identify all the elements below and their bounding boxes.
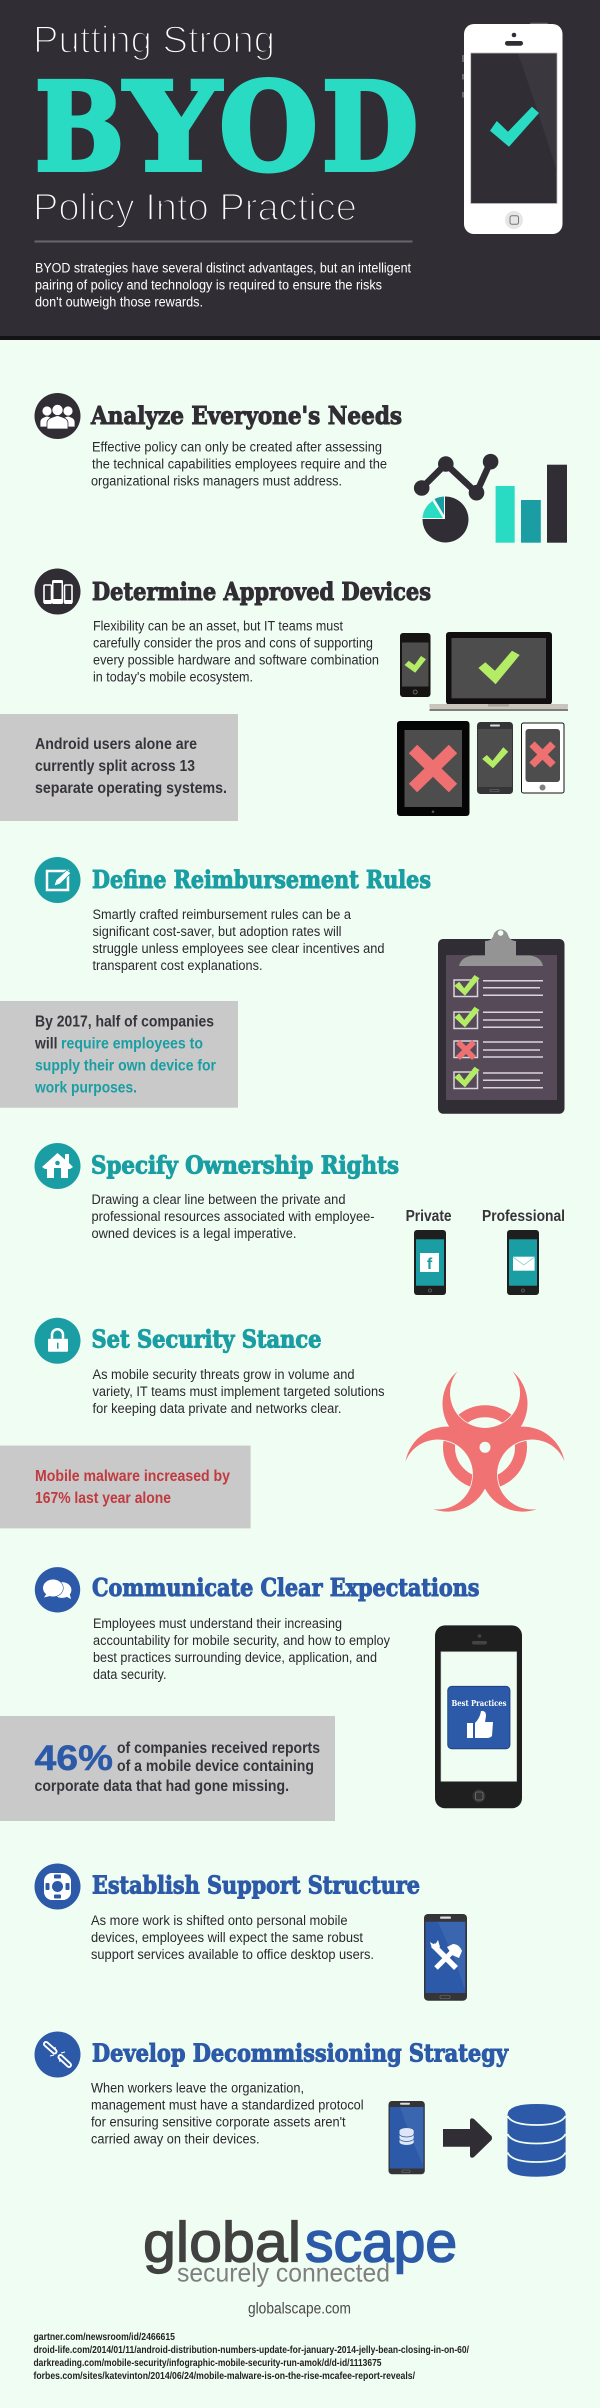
body text: carefully consider the pros and cons of supporting	[93, 636, 373, 651]
intro text: don't outweigh those rewards.	[35, 295, 203, 310]
intro text: BYOD strategies have several distinct advantages, but an intelligent	[35, 261, 411, 276]
sources: darkreading.com/mobile-security/infographic-mobile-security-run-amok/d/d-id/1113675	[34, 2358, 382, 2369]
panel: header	[0, 0, 600, 340]
body text: Smartly crafted reimbursement rules can be a	[92, 907, 351, 922]
heading: Set Security Stance	[92, 1325, 322, 1354]
heading: Determine Approved Devices	[92, 577, 431, 606]
body text: Employees must understand their increasing	[93, 1616, 342, 1631]
body text	[92, 907, 384, 973]
icon: speech bubbles	[35, 1567, 80, 1613]
callout: Android: Android users alone are	[35, 736, 197, 753]
body text: struggle unless employees see clear incentives and	[92, 941, 384, 956]
logo: globalscape	[143, 2211, 457, 2288]
icon: edit	[34, 857, 80, 903]
title: BYOD	[35, 56, 418, 198]
icon: lifebuoy	[34, 1864, 80, 1910]
body text	[91, 1913, 374, 1962]
sources	[34, 2332, 469, 2382]
body text: organizational risks managers must address.	[91, 474, 342, 489]
body text: Flexibility can be an asset, but IT teams must	[93, 619, 343, 634]
callout: Android	[0, 714, 238, 821]
body text: carried away on their devices.	[91, 2132, 260, 2147]
icon: people	[34, 393, 80, 439]
icon: professional phone	[507, 1230, 539, 1295]
icon: database	[508, 2104, 566, 2177]
website link: globalscape.com	[248, 2300, 351, 2317]
icon: private phone	[414, 1230, 446, 1295]
heading: Define Reimbursement Rules	[92, 865, 431, 894]
body text: When workers leave the organization,	[91, 2081, 304, 2096]
body text: the technical capabilities employees require and the	[92, 457, 387, 472]
callout: 46%: of companies received reports	[117, 1740, 320, 1757]
logo: globalscape: securely connected	[177, 2258, 390, 2288]
callout: 2017: supply their own device for	[35, 1058, 216, 1075]
section: Communicate Clear Expectations	[0, 1567, 522, 1821]
body text	[93, 619, 379, 685]
callout: Android: currently split across 13	[35, 758, 195, 775]
label: Professional: Professional	[482, 1208, 565, 1225]
section: Specify Ownership Rights	[34, 1143, 565, 1295]
body text: management must have a standardized protocol	[91, 2098, 364, 2113]
sources: gartner.com/newsroom/id/2466615	[34, 2332, 175, 2343]
heading: Specify Ownership Rights	[91, 1150, 399, 1179]
body text: every possible hardware and software combination	[93, 653, 379, 668]
heading: Communicate Clear Expectations	[92, 1573, 480, 1602]
title: BYOD: B	[35, 56, 124, 198]
body text: devices, employees will expect the same robust	[91, 1930, 363, 1945]
body text	[91, 440, 387, 489]
section: Analyze Everyone's Needs	[34, 393, 567, 543]
body text: in today's mobile ecosystem.	[93, 670, 253, 685]
title: BYOD: Y	[123, 56, 222, 198]
icon: phone with database	[388, 2101, 425, 2174]
body text: owned devices is a legal imperative.	[92, 1226, 296, 1241]
title: Putting Strong: Putting Strong	[33, 20, 275, 62]
body text: Effective policy can only be created after assessing	[92, 440, 382, 455]
icon: biohazard	[398, 1371, 572, 1522]
logo: globalscape: global	[143, 2211, 301, 2275]
section: Determine Approved Devices	[0, 568, 568, 821]
body text: for keeping data private and networks clear.	[92, 1401, 342, 1416]
callout: 2017: will	[34, 1036, 58, 1053]
callout: 46%	[0, 1716, 335, 1821]
title: Policy Into Practice: Policy Into Practice	[33, 187, 357, 229]
callout: 46%: 46%	[34, 1739, 113, 1778]
section: Set Security Stance	[0, 1318, 572, 1528]
icon: lock	[34, 1318, 80, 1364]
body text: As more work is shifted onto personal mobile	[91, 1913, 348, 1928]
callout: 46%: of a mobile device containing	[117, 1758, 314, 1775]
icon: approved phone	[400, 633, 430, 697]
body text	[92, 1192, 374, 1241]
icon: approved galaxy phone	[477, 722, 513, 794]
callout: 46%: corporate data that had gone missing.	[34, 1778, 289, 1795]
callout: 2017: By 2017, half of companies	[35, 1014, 214, 1031]
sources: droid-life.com/2014/01/11/android-distribution-numbers-update-for-january-2014-jelly-bean-closing-in-on-60/	[34, 2345, 469, 2356]
body text: transparent cost explanations.	[92, 958, 262, 973]
section: Develop Decommissioning Strategy	[34, 2032, 566, 2177]
callout: 2017: work purposes.	[34, 1080, 137, 1097]
icon: private phone: f	[427, 1256, 433, 1273]
icon: phone with check	[462, 23, 562, 234]
callout: malware	[0, 1446, 251, 1528]
body text: support services available to office desktop users.	[91, 1947, 374, 1962]
body text: data security.	[93, 1667, 166, 1682]
body text: for ensuring sensitive corporate assets aren't	[91, 2115, 346, 2130]
body text: variety, IT teams must implement targeted solutions	[92, 1384, 385, 1399]
body text: accountability for mobile security, and how to employ	[93, 1633, 390, 1648]
heading: Develop Decommissioning Strategy	[92, 2039, 509, 2068]
callout: malware: Mobile malware increased by	[35, 1468, 230, 1485]
intro text: pairing of policy and technology is required to ensure the risks	[35, 278, 382, 293]
body text: significant cost-saver, but adoption rates will	[92, 924, 342, 939]
label: Private: Private	[406, 1208, 452, 1225]
title: BYOD: O	[220, 56, 318, 198]
icon: house	[34, 1143, 80, 1189]
icon: phone with best practices badge	[435, 1625, 522, 1808]
callout: Android: separate operating systems.	[35, 780, 227, 797]
body text	[93, 1616, 390, 1682]
body text	[92, 1367, 385, 1416]
callout: malware: 167% last year alone	[35, 1490, 171, 1507]
body text	[91, 2081, 364, 2147]
sources: forbes.com/sites/katevinton/2014/06/24/mobile-malware-is-on-the-rise-mcafee-report-reveals/	[34, 2371, 415, 2382]
intro text	[35, 261, 411, 310]
section: Establish Support Structure	[34, 1864, 467, 2001]
section: Define Reimbursement Rules	[0, 857, 564, 1114]
icon: approved laptop	[430, 632, 568, 711]
logo: globalscape: scape	[305, 2211, 457, 2275]
body text: best practices surrounding device, application, and	[93, 1650, 377, 1665]
arrow	[443, 2118, 492, 2158]
callout: 2017: require employees to	[61, 1036, 203, 1053]
icon: phones	[34, 568, 80, 614]
icon: phone with best practices badge: Best Practices	[452, 1698, 507, 1708]
title: BYOD: D	[322, 56, 418, 198]
body text: professional resources associated with employee-	[92, 1209, 374, 1224]
icon: clipboard checklist	[438, 929, 564, 1114]
icon: phone with tools	[424, 1914, 467, 2001]
heading: Establish Support Structure	[92, 1870, 420, 1899]
callout: 2017	[0, 1001, 238, 1108]
heading: Analyze Everyone's Needs	[90, 401, 402, 430]
body text: Drawing a clear line between the private and	[92, 1192, 346, 1207]
icon: broken chain	[34, 2032, 80, 2078]
body text: As mobile security threats grow in volume and	[92, 1367, 354, 1382]
icon: rejected white phone	[522, 723, 564, 793]
icon: charts	[414, 454, 567, 543]
icon: rejected tablet	[397, 721, 470, 816]
